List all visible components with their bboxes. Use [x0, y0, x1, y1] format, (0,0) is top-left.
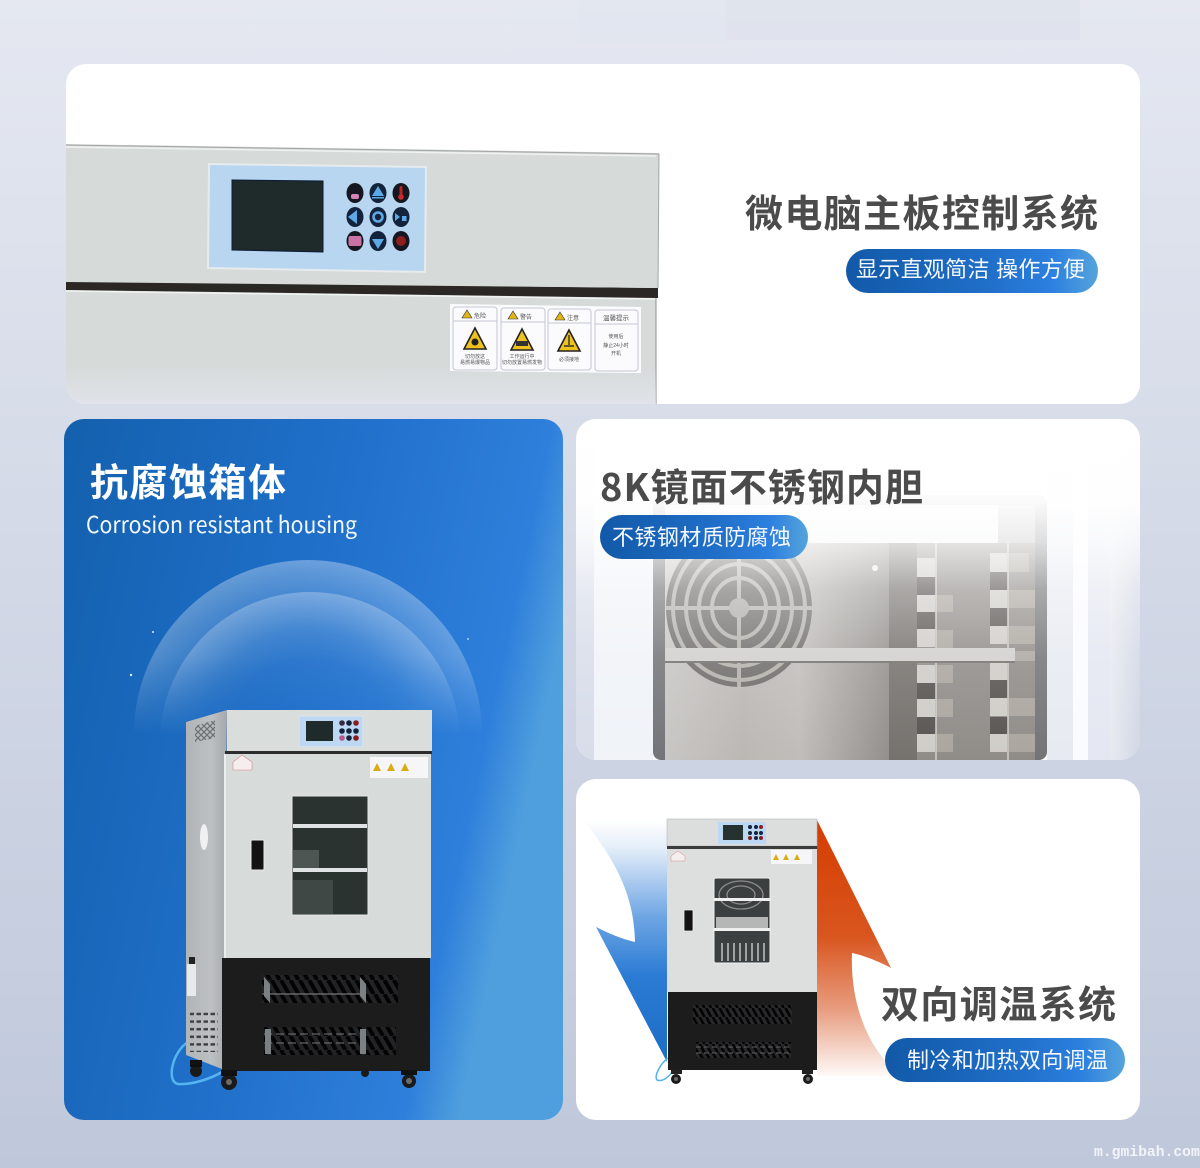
decorative domes	[130, 560, 482, 726]
warning stickers: 静止24小时	[603, 342, 629, 349]
warning stickers	[450, 304, 641, 373]
warning stickers: 工作运行中	[509, 353, 535, 360]
arrow: cooling blue	[583, 820, 667, 1062]
heading: microcomputer mainboard: 微电脑主板控制系统	[745, 183, 1098, 238]
fan guard	[666, 557, 812, 687]
warning stickers: 切勿放置易燃发物	[502, 359, 542, 366]
control panel face	[208, 164, 426, 272]
warning stickers: 切勿放这	[465, 353, 485, 360]
shelf rack tabs	[917, 543, 1035, 760]
cabinet front illustration	[656, 819, 817, 1084]
heading: 8K mirror stainless: 8K镜面不锈钢内胆	[600, 457, 923, 512]
pill: stainless anti-corrosion	[600, 515, 808, 559]
photo: chamber interior	[576, 506, 1140, 760]
warning stickers: 使用后	[608, 333, 624, 340]
warning stickers: 危险	[474, 312, 486, 320]
pill: simple display	[846, 249, 1098, 293]
panel: bidirectional temperature system	[576, 779, 1140, 1120]
warning stickers: 警告	[520, 313, 532, 321]
watermark: m.gmibah.com	[1094, 1145, 1200, 1161]
arrow: heating red	[817, 820, 902, 1076]
warning stickers: 注意	[567, 314, 579, 322]
panel: microcomputer control system	[66, 64, 1140, 404]
warning stickers: 易燃易爆物品	[460, 359, 490, 366]
pill: stainless anti-corrosion: 不锈钢材质防腐蚀	[612, 525, 791, 550]
warning stickers: 必须接地	[559, 356, 579, 363]
cabinet illustration	[172, 710, 432, 1090]
warning stickers: 温馨提示	[603, 313, 630, 322]
heading: bidirectional temperature: 双向调温系统	[881, 974, 1116, 1029]
subheading: Corrosion resistant housing	[86, 506, 357, 540]
panel: 8K mirror stainless steel liner	[576, 419, 1140, 760]
pill: cooling and heating	[885, 1038, 1125, 1082]
warning stickers: 开机	[611, 350, 621, 357]
pill: simple display: 显示直观简洁 操作方便	[856, 257, 1085, 282]
panel: corrosion resistant housing	[64, 419, 563, 1120]
heading: anti-corrosion box: 抗腐蚀箱体	[90, 452, 286, 507]
pill: cooling and heating: 制冷和加热双向调温	[907, 1048, 1108, 1073]
photo: control panel close-up	[66, 144, 659, 404]
